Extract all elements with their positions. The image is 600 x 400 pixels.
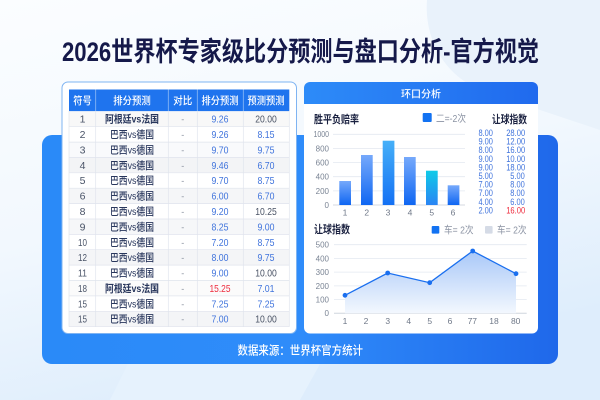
table rows: -: [181, 192, 184, 202]
table rows: 巴西vs德国: [110, 313, 154, 326]
table rows: 9.26: [212, 114, 229, 126]
handicap index list: 7.00: [478, 180, 493, 191]
panel header: 环口分析: [401, 88, 441, 100]
line chart: handicap index: 200: [316, 282, 330, 291]
table rows: -: [181, 268, 184, 278]
bar chart: win draw lose odds: 200: [316, 187, 330, 196]
bar chart: win draw lose odds: 2: [364, 208, 369, 218]
bar chart: win draw lose odds: 1: [343, 208, 348, 218]
table rows: -: [181, 238, 184, 248]
table rows: 7.25: [212, 298, 229, 310]
line chart legend: 车= 2次: [444, 224, 474, 236]
table header: 对比: [173, 94, 192, 107]
bar chart: win draw lose odds: 5: [429, 208, 434, 218]
table rows: 2: [80, 129, 86, 141]
table rows: 巴西vs德国: [110, 144, 154, 156]
table rows: 9.46: [212, 160, 229, 172]
handicap index list: 9.00: [478, 137, 493, 148]
bar chart: win draw lose odds: [314, 112, 466, 218]
handicap index list: 5.00: [478, 171, 493, 182]
table header: 符号: [73, 94, 92, 107]
table header: 排分预测: [113, 94, 151, 107]
line chart: handicap index: [314, 222, 527, 326]
line chart: handicap index: 1: [343, 316, 348, 326]
table rows: 3: [80, 144, 86, 156]
table rows: 巴西vs德国: [110, 174, 154, 187]
table rows: -: [181, 222, 184, 232]
handicap index list: 6.00: [510, 197, 525, 208]
bar chart: win draw lose odds: 400: [316, 173, 330, 182]
line chart: handicap index: 18: [489, 316, 499, 326]
table rows: 15: [78, 314, 87, 326]
table rows: 9: [80, 221, 86, 233]
table rows: 10: [78, 237, 87, 249]
table rows: 8.15: [258, 129, 275, 141]
table rows: 1: [80, 114, 86, 126]
handicap index list: 5.00: [510, 171, 525, 182]
line chart: handicap index: 0: [325, 309, 330, 318]
table rows: 7.01: [258, 283, 275, 295]
blue backing panel: [42, 135, 558, 364]
table rows: 15.25: [210, 283, 231, 295]
bar chart: win draw lose odds: 6: [451, 208, 456, 218]
table rows: 巴西vs德国: [110, 266, 154, 280]
handicap index list: [478, 112, 527, 216]
table rows: 9.00: [212, 268, 229, 280]
handicap index list: 16.00: [506, 145, 525, 156]
line chart: handicap index: 2: [364, 316, 369, 326]
table rows: -: [181, 315, 184, 325]
bar chart: win draw lose odds: 胜平负赔率: [314, 112, 359, 126]
table rows: 15: [78, 298, 87, 310]
table rows: -: [181, 176, 184, 186]
line chart: handicap index: 500: [316, 241, 330, 250]
line chart: handicap index: 400: [316, 254, 330, 263]
table rows: 6.70: [258, 191, 275, 203]
table rows: 8.25: [212, 221, 229, 233]
data source footer: 数据来源：世界杯官方统计: [238, 342, 363, 358]
table rows: 20.00: [255, 114, 277, 126]
table rows: 8.75: [258, 237, 275, 249]
table rows: 阿根廷vs法国: [105, 113, 159, 126]
table rows: -: [181, 253, 184, 263]
line chart: handicap index: 77: [468, 316, 477, 326]
table rows: 9.26: [212, 129, 229, 141]
panel header: [304, 82, 538, 104]
bar chart legend: 二=-2次: [436, 112, 466, 125]
handicap index list: 8.00: [510, 188, 525, 199]
table rows: 10.25: [255, 206, 277, 218]
table rows: 12: [78, 252, 87, 264]
line chart legend: [432, 224, 526, 236]
table rows: 6: [80, 191, 86, 203]
table rows: 9.75: [258, 144, 275, 156]
table rows: 9.20: [212, 206, 229, 218]
line chart legend: 车= 2次: [497, 224, 526, 236]
handicap index list: 8.00: [510, 180, 525, 191]
bar chart: win draw lose odds: 600: [316, 158, 330, 168]
table rows: 巴西vs德国: [110, 128, 154, 141]
table rows: 8.75: [258, 175, 275, 187]
table rows: 巴西vs德国: [110, 251, 154, 264]
table rows: 巴西vs德国: [110, 220, 154, 233]
line chart: handicap index: 300: [316, 268, 330, 277]
table rows: 9.00: [258, 221, 275, 233]
handicap index list: 18.00: [506, 162, 525, 173]
handicap index list: 9.00: [478, 154, 493, 165]
bar chart: win draw lose odds: 3: [386, 208, 391, 218]
table rows: 6.70: [258, 160, 275, 172]
handicap index list: 2.00: [478, 205, 493, 216]
handicap index list: 9.00: [478, 162, 493, 173]
handicap index list: 8.00: [478, 128, 493, 139]
table rows: 4: [80, 160, 86, 172]
table rows: 9.75: [258, 252, 275, 264]
bar chart: win draw lose odds: 1000: [314, 130, 329, 139]
table rows: -: [181, 146, 184, 156]
table rows: 7.00: [212, 314, 229, 326]
handicap index list: 4.00: [478, 197, 493, 208]
table header: 预测预测: [248, 94, 284, 107]
handicap index list: 16.00: [506, 205, 525, 216]
line chart: handicap index: 让球指数: [314, 222, 350, 236]
table rows: 9.70: [212, 144, 229, 156]
table rows: 巴西vs德国: [110, 190, 154, 203]
table rows: -: [181, 130, 184, 140]
line chart: handicap index: 6: [448, 316, 453, 326]
bar chart: win draw lose odds: 0: [325, 201, 330, 210]
table rows: 7.20: [212, 237, 229, 249]
line chart: handicap index: 100: [316, 296, 330, 304]
table header: [69, 90, 289, 111]
table rows: 10.00: [255, 314, 277, 326]
table rows: -: [181, 299, 184, 309]
handicap index list: 12.00: [506, 137, 525, 148]
handicap index list: 28.00: [506, 128, 525, 139]
table rows: 巴西vs德国: [110, 236, 154, 249]
table rows: 8: [80, 206, 86, 218]
table rows: 巴西vs德国: [110, 297, 154, 310]
table rows: 巴西vs德国: [110, 159, 154, 172]
table rows: 巴西vs德国: [110, 205, 154, 218]
table rows: 5: [80, 175, 86, 187]
table rows: -: [181, 161, 184, 171]
bar chart legend: [423, 112, 466, 125]
table rows: 11: [78, 268, 87, 280]
table rows: 10.00: [255, 268, 277, 280]
handicap index list: 让球指数: [492, 112, 527, 126]
table rows: -: [181, 115, 184, 125]
table rows: -: [181, 207, 184, 217]
line chart: handicap index: 3: [385, 316, 390, 326]
line chart: handicap index: 5: [427, 316, 432, 326]
table rows: 6.00: [212, 191, 229, 203]
handicap index list: 8.00: [478, 145, 493, 156]
table header: 排分预测: [202, 94, 238, 107]
handicap index list: 7.00: [478, 188, 493, 199]
table rows: 8.00: [212, 252, 229, 264]
table rows: [69, 111, 289, 327]
bar chart: win draw lose odds: 800: [316, 144, 330, 153]
table rows: 18: [78, 283, 87, 295]
bar chart: win draw lose odds: 4: [408, 208, 413, 218]
line chart: handicap index: 4: [406, 316, 411, 326]
line chart: handicap index: 80: [511, 316, 521, 326]
panel: prediction table: [62, 82, 296, 334]
table rows: 阿根廷vs法国: [105, 282, 159, 295]
table rows: 7.25: [258, 298, 275, 310]
handicap index list: 10.00: [506, 154, 525, 165]
table rows: -: [181, 284, 184, 294]
table rows: 9.70: [212, 175, 229, 187]
panel: analysis: [304, 82, 538, 334]
